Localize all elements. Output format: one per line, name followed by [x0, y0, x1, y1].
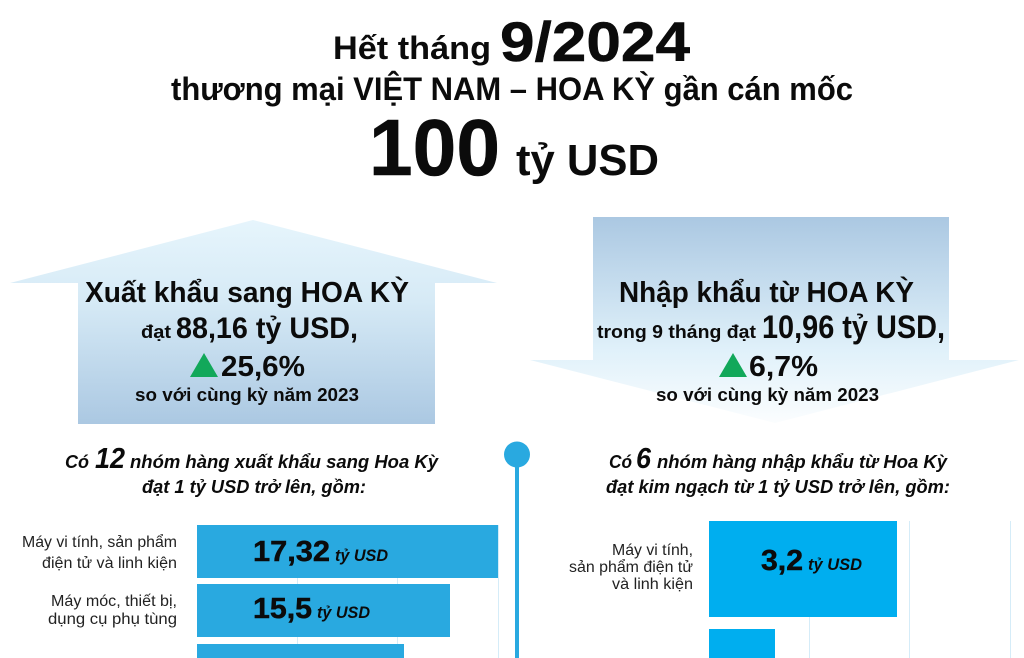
import groups heading: [606, 443, 950, 497]
bar: computers and electronics: và linh kiện: [612, 576, 693, 593]
bar: computers and electronics: tỷ USD: [808, 555, 862, 574]
bar: computers and electronics: sản phẩm điện tử: [569, 559, 693, 576]
bar: computers and electronics: điện tử và linh kiện: [42, 555, 177, 572]
import comparison note: so với cùng kỳ năm 2023: [656, 385, 879, 405]
bar: computers and electronics: 17,32: [253, 536, 330, 568]
bar: computers and electronics: [22, 525, 498, 578]
export groups heading: đạt 1 tỷ USD trở lên, gồm:: [142, 477, 366, 497]
title: tỷ USD: [516, 136, 659, 185]
export groups heading: Có: [65, 452, 89, 472]
arrow shape: down: [530, 217, 1019, 423]
bar: machinery and equipment: Máy móc, thiết bị,: [51, 593, 177, 610]
bar: machinery and equipment: 15,5: [253, 593, 312, 625]
import value: 10,96 tỷ USD,: [762, 309, 945, 345]
panel: export up arrow: [10, 220, 497, 424]
center timeline divider: [504, 442, 530, 658]
export groups heading: nhóm hàng xuất khẩu sang Hoa Kỳ: [130, 452, 439, 472]
export groups heading: 12: [95, 443, 125, 475]
export groups heading: [65, 443, 439, 497]
bar: third export group: [197, 644, 404, 658]
title: 100: [369, 103, 500, 192]
export heading: Xuất khẩu sang HOA KỲ: [85, 275, 409, 309]
bar chart: exports: [22, 525, 498, 658]
bar: computers and electronics: [569, 521, 897, 617]
import growth: 6,7%: [749, 351, 818, 383]
export comparison note: so với cùng kỳ năm 2023: [135, 385, 359, 405]
title: 9/2024: [500, 10, 690, 73]
title: Hết tháng: [333, 30, 491, 66]
import groups heading: đạt kim ngạch từ 1 tỷ USD trở lên, gồm:: [606, 477, 950, 497]
export growth: 25,6%: [221, 351, 305, 383]
bar: computers and electronics: 3,2: [761, 545, 803, 577]
bar: second import group: [709, 629, 775, 658]
import value: trong 9 tháng đạt: [597, 322, 756, 342]
bar: computers and electronics: Máy vi tính, sản phẩm: [22, 534, 177, 551]
icon: green up triangle: [719, 353, 747, 377]
export value: 88,16 tỷ USD,: [176, 312, 358, 345]
bar: computers and electronics: tỷ USD: [335, 546, 388, 565]
import groups heading: nhóm hàng nhập khẩu từ Hoa Kỳ: [657, 452, 948, 472]
bar: machinery and equipment: tỷ USD: [317, 603, 370, 622]
import heading: Nhập khẩu từ HOA KỲ: [619, 275, 914, 309]
import value: [597, 309, 945, 345]
bar: computers and electronics: Máy vi tính,: [612, 542, 693, 559]
import groups heading: 6: [636, 443, 652, 475]
icon: green up triangle: [190, 353, 218, 377]
import groups heading: Có: [609, 452, 632, 472]
bar: machinery and equipment: dụng cụ phụ tùng: [48, 611, 177, 628]
title: thương mại VIỆT NAM – HOA KỲ gần cán mốc: [171, 71, 853, 107]
title: [171, 10, 853, 192]
bar chart: imports: [569, 521, 1010, 658]
export value: đạt: [141, 322, 171, 342]
bar: machinery and equipment: [48, 584, 450, 637]
arrow shape: up: [10, 220, 497, 424]
panel: import down arrow: [530, 217, 1019, 423]
